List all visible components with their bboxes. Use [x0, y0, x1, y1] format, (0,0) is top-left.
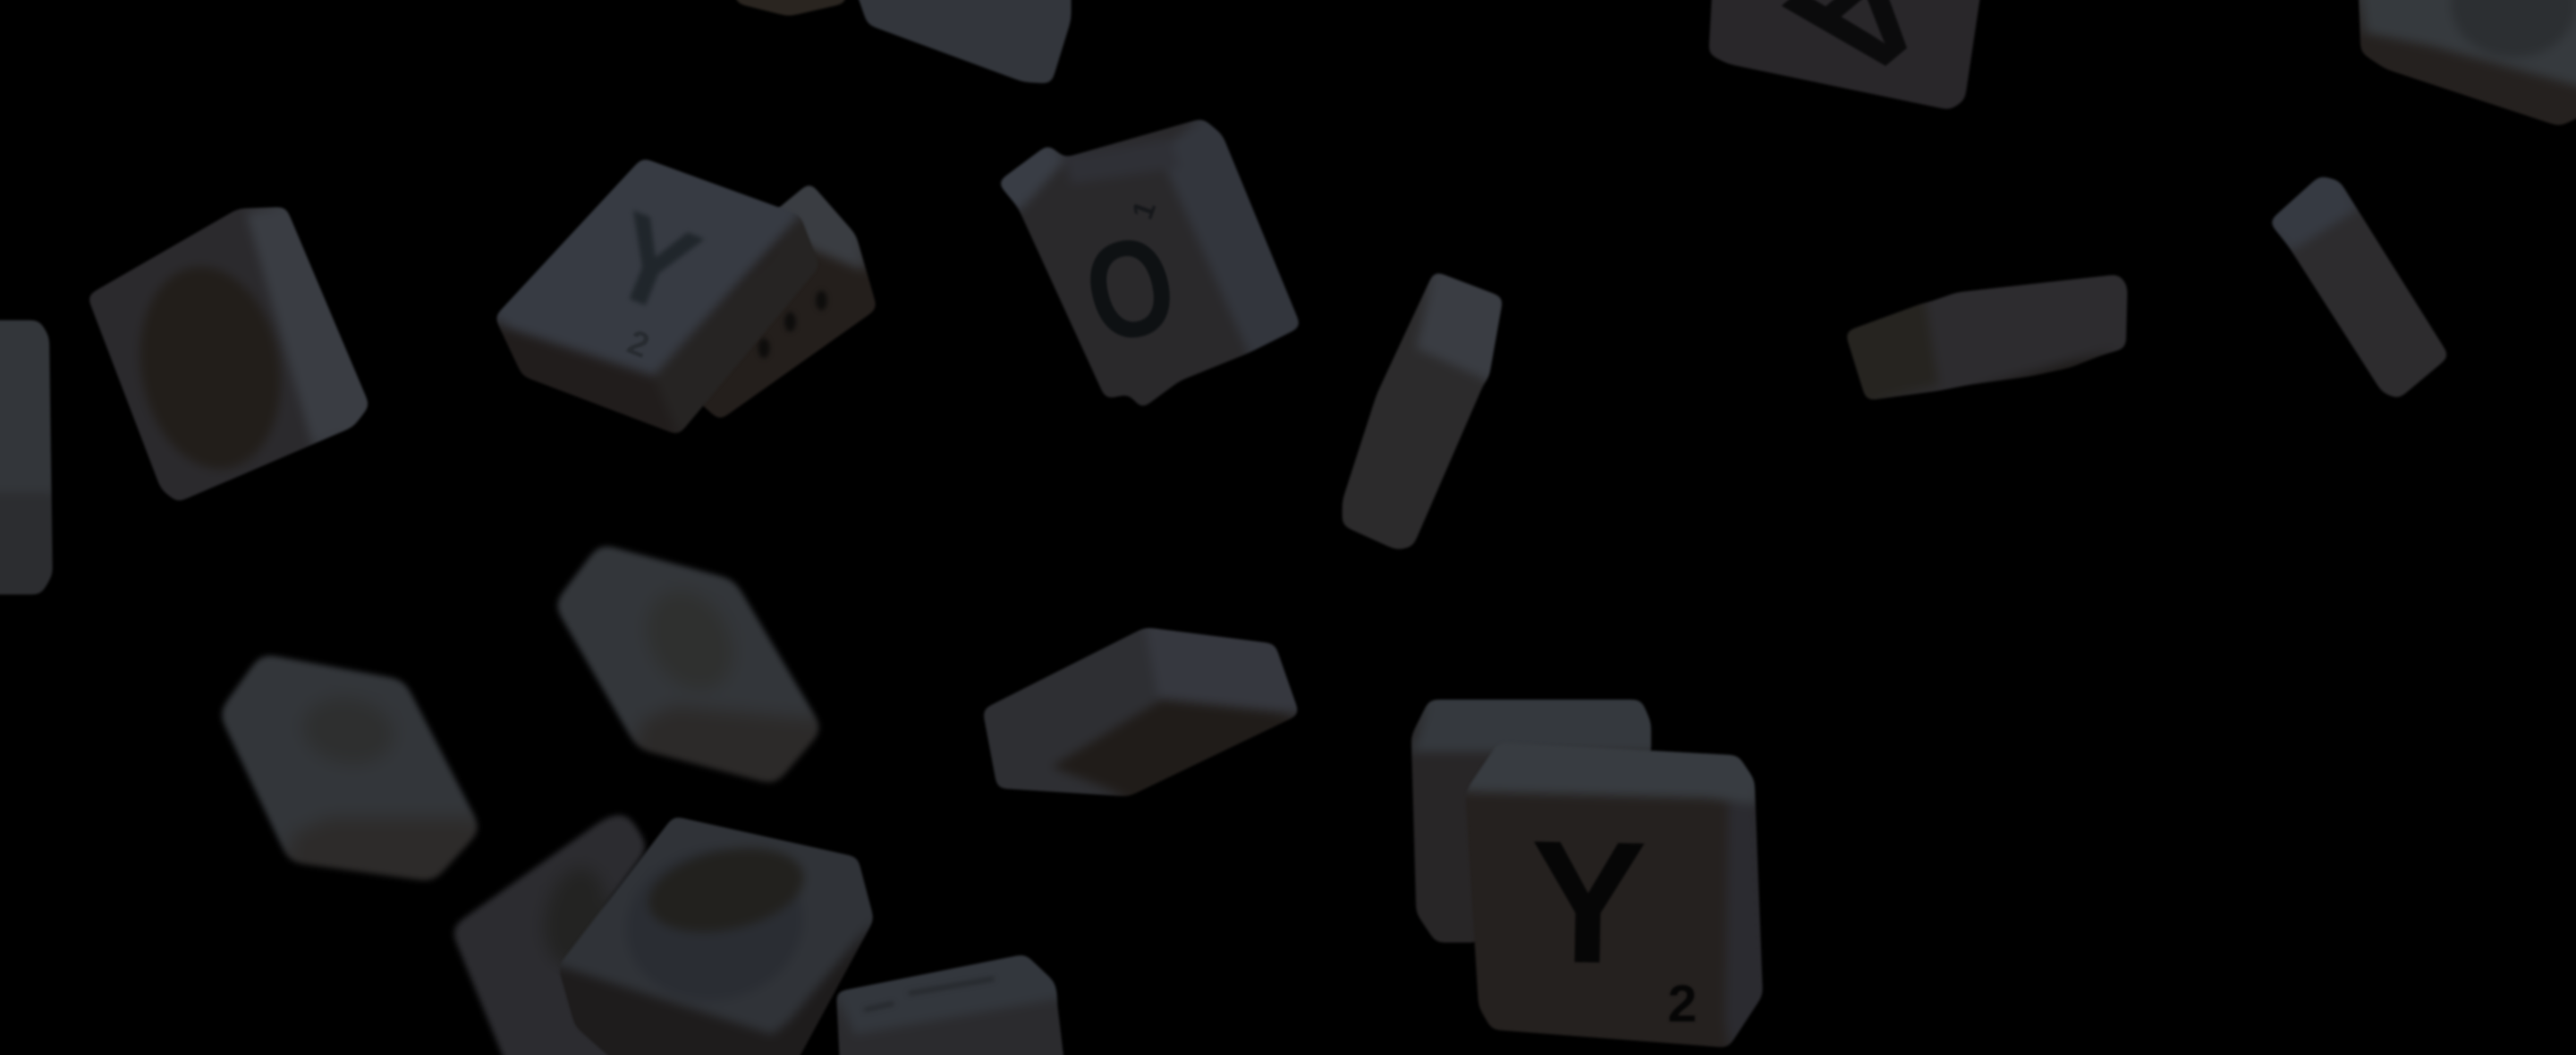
letter O: O [1070, 204, 1191, 374]
tile: behind lower left stack [450, 813, 664, 1055]
tile: edge-on, centre lower [982, 628, 1300, 797]
tile: Y, front lower centre [1465, 742, 1763, 1048]
printed marks [758, 291, 827, 358]
tile: behind Y tile, upper left [690, 182, 877, 420]
tile: O, upper centre [997, 118, 1301, 409]
tile: recessed back, centre left [554, 544, 823, 785]
tile: left edge sliver [0, 320, 53, 595]
letter Y: Y [1529, 805, 1648, 1000]
tile: recessed back, lower left stack front [558, 816, 874, 1055]
tile: flat edge-on, right [1845, 274, 2128, 401]
tile: A, top right of centre [1708, 0, 1980, 110]
printed lines [864, 979, 994, 1010]
value 1: 1 [1126, 197, 1163, 224]
value 2: 2 [623, 323, 655, 366]
value 2: 2 [1667, 975, 1697, 1033]
tile: recessed back, top right corner [2358, 0, 2576, 126]
tile: top edge pair [731, 0, 1072, 84]
tile: slanted edge-on, far right [2269, 176, 2450, 399]
tile: recessed back, lower left [218, 654, 481, 882]
letter Y: Y [590, 185, 716, 342]
tile: Y, upper left [495, 157, 820, 435]
tile: bottom edge [836, 954, 1068, 1055]
tile: recessed back, upper left [87, 207, 369, 502]
tile: thin edge-on, centre [1343, 271, 1504, 550]
tile: blank, behind front Y [1411, 699, 1651, 942]
